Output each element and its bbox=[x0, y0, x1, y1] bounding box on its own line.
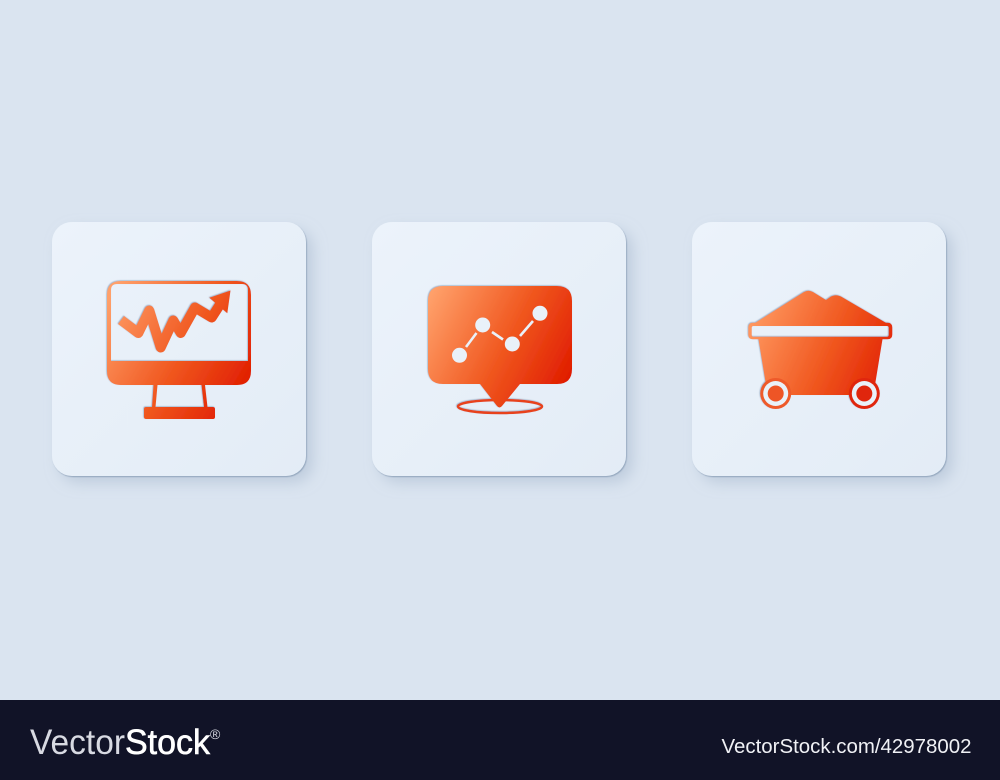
monitor frame bbox=[107, 281, 251, 385]
ore pile bbox=[755, 291, 888, 324]
right wheel bbox=[849, 378, 880, 409]
chart line bbox=[121, 303, 221, 348]
cart rim bbox=[748, 323, 892, 339]
location ring bbox=[458, 400, 542, 413]
icon: speech pin with line chart bbox=[428, 286, 572, 413]
panel: map pin chart card bbox=[372, 222, 626, 476]
line chart connectors bbox=[466, 321, 533, 347]
left wheel bbox=[760, 378, 791, 409]
monitor stand bbox=[152, 385, 208, 407]
line chart dots bbox=[452, 306, 548, 363]
pin bubble bbox=[428, 286, 572, 408]
logo: VectorStock: Stock bbox=[125, 723, 210, 762]
icon: mine cart with ore bbox=[748, 291, 892, 409]
cart body bbox=[758, 338, 883, 395]
monitor base bbox=[144, 407, 215, 419]
logo: VectorStock: Vector bbox=[30, 723, 125, 762]
icon: monitor with rising chart bbox=[107, 281, 251, 419]
image id text: VectorStock.com/42978002 bbox=[722, 736, 972, 758]
logo: VectorStock: ® bbox=[210, 726, 221, 742]
chart arrow head bbox=[209, 290, 230, 313]
logo: VectorStock bbox=[30, 723, 221, 762]
panel: monitor card bbox=[52, 222, 306, 476]
panel: mine cart card bbox=[692, 222, 946, 476]
footer bar bbox=[0, 700, 1000, 780]
